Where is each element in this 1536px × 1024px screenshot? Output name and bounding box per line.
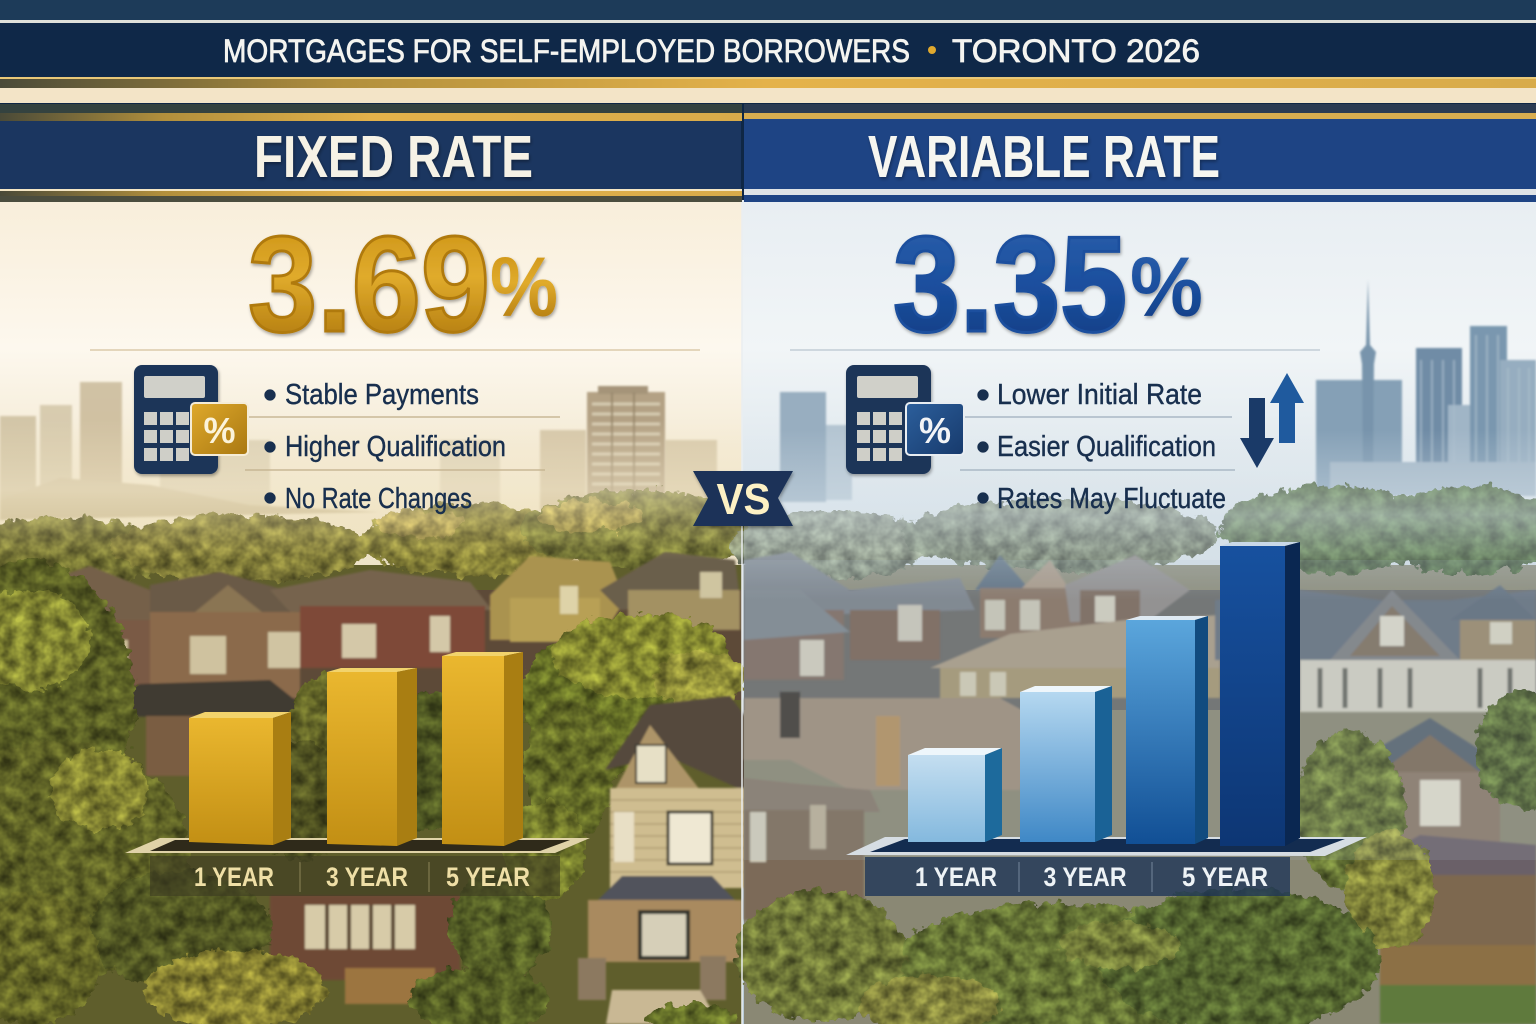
axis labels: 5 YEAR [446,862,530,892]
vs ribbon [693,471,793,526]
far right houses [1215,590,1536,660]
bar chart: fixed rate [125,652,590,896]
distant treeline [0,490,760,586]
title separator dot [928,46,936,54]
icon: calculator with gold percent badge: % [203,410,236,451]
bullet list: variable rate [978,379,1226,515]
big rate: 3.35%: 3.35 [893,208,1127,360]
cream house [578,696,800,1024]
bullet list: fixed rate: Stable Payments [285,379,479,411]
axis labels: 3 YEAR [1044,862,1126,892]
icon: calculator with blue percent badge: % [919,410,951,451]
tint: variable side cool [744,560,1536,860]
left faded skyline [0,382,717,520]
scene: fixed side neighbourhood [0,490,800,1024]
bar: 5 year [442,652,523,846]
distant treeline [730,486,1536,579]
house rows [744,590,1536,710]
platform [846,837,1367,856]
Toronto skyline [780,280,1536,502]
vs ribbon: VS [716,475,770,524]
haze: fixed side [0,420,742,560]
heading text: VARIABLE RATE [868,124,1220,190]
left tree mass [0,560,736,1024]
bar: 3 year [327,668,417,846]
axis labels: 3 YEAR [326,862,408,892]
title text: MORTGAGES FOR SELF-EMPLOYED BORROWERS [223,33,910,69]
panel: variable rate background [742,200,1536,1024]
bar: tallest [1220,542,1300,846]
ground base [0,565,742,1024]
scene: variable side neighbourhood [730,486,1536,1024]
midground trees behind bars [250,613,746,860]
heading text: FIXED RATE [254,124,533,190]
axis labels [150,856,560,896]
ground base [744,565,1536,1024]
axis labels [865,857,1290,896]
bullet list: fixed rate [264,379,506,515]
axis labels: 1 YEAR [915,862,997,892]
house row base [0,590,742,700]
header: variable rate [744,104,1536,202]
panel: fixed rate background [0,200,742,1024]
header: fixed rate [0,104,742,202]
bar: 3 year [1020,686,1112,842]
bullet list: fixed rate: No Rate Changes [285,483,472,515]
houses row [20,552,740,776]
lower right house [1340,718,1515,772]
icon: calculator with blue percent badge [846,365,964,474]
haze: variable side [744,430,1536,600]
bar: 1 year [189,712,291,845]
divider [741,200,743,1024]
top banner [0,0,1536,103]
bullet list: variable rate: Lower Initial Rate [997,379,1202,411]
big rate: 3.69%: 3.69 [248,208,490,360]
axis labels: 5 YEAR [1182,862,1268,892]
axis labels: 1 YEAR [194,862,274,892]
bullet list: variable rate: Rates May Fluctuate [997,483,1226,515]
icon: calculator with gold percent badge [134,365,248,474]
lower brick house [270,895,460,1004]
tan foreground roof [744,698,1040,790]
bar: 5 year side group [1126,616,1208,844]
bar: 1 year [908,748,1002,842]
icon: up and down arrows [1240,373,1304,468]
bullet list: variable rate: Easier Qualification [997,431,1216,463]
big rate: 3.69%: % [490,240,558,334]
bar chart: variable rate [846,542,1367,896]
title location: TORONTO 2026 [952,33,1200,69]
tall apartment building [587,386,665,510]
bullet list: fixed rate: Higher Qualification [285,431,506,463]
big rate: 3.35%: % [1130,240,1203,334]
platform [125,838,590,853]
right side foliage [735,690,1536,1024]
long tan roof [930,615,1220,670]
